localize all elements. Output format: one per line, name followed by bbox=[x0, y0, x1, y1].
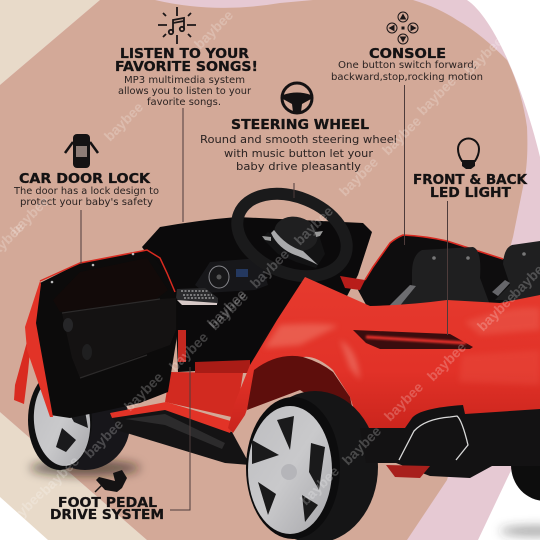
icon: console bbox=[387, 12, 418, 44]
rear bumper bbox=[360, 405, 540, 478]
watermarks: baybee bbox=[206, 288, 251, 333]
watermarks: baybee bbox=[414, 73, 459, 118]
watermarks: baybee bbox=[291, 203, 336, 248]
watermarks: baybee bbox=[204, 286, 249, 331]
heading: listen: FAVORITE SONGS! bbox=[115, 59, 258, 75]
heading: listen bbox=[115, 46, 258, 75]
text: listen: allows you to listen to your bbox=[118, 86, 252, 97]
text: steering: with music button let your bbox=[224, 147, 373, 160]
watermarks: baybee bbox=[336, 154, 381, 199]
heading: led bbox=[413, 172, 528, 201]
watermarks: baybee bbox=[7, 193, 52, 238]
heading: foot pedal: DRIVE SYSTEM bbox=[50, 507, 164, 523]
watermarks: baybee bbox=[81, 416, 126, 461]
open door bbox=[25, 250, 178, 418]
taillight bbox=[353, 330, 473, 349]
heading: console: CONSOLE bbox=[369, 46, 446, 62]
text: door lock: The door has a lock design to bbox=[13, 186, 159, 197]
watermarks: baybee bbox=[247, 246, 292, 291]
text: door lock: protect your baby's safety bbox=[20, 197, 153, 208]
watermarks: baybee bbox=[297, 463, 342, 508]
icon: steering wheel bbox=[282, 83, 312, 113]
watermarks: baybee bbox=[474, 289, 519, 334]
rear seats bbox=[387, 241, 540, 308]
watermarks: baybee bbox=[166, 329, 211, 374]
text: door lock bbox=[13, 186, 159, 208]
text: listen: favorite songs. bbox=[147, 97, 221, 108]
watermarks: baybee bbox=[461, 33, 506, 78]
watermarks: baybee bbox=[121, 369, 166, 414]
watermarks: baybee bbox=[101, 99, 146, 144]
watermarks: baybee bbox=[339, 423, 384, 468]
callout lines bbox=[81, 85, 448, 510]
text: console bbox=[331, 60, 483, 83]
watermarks: baybee bbox=[381, 379, 426, 424]
icon: door bbox=[65, 134, 98, 168]
dashboard and cabin bbox=[142, 217, 372, 372]
icon: bulb bbox=[458, 138, 479, 169]
text: console: backward,stop,rocking motion bbox=[331, 72, 483, 83]
front left wheel bbox=[28, 370, 130, 470]
sill bbox=[112, 408, 250, 465]
icon: music bbox=[158, 7, 196, 44]
watermarks: baybee bbox=[2, 486, 47, 531]
text: steering bbox=[200, 133, 397, 173]
rear cockpit rim bbox=[358, 235, 540, 312]
watermarks: baybee bbox=[379, 113, 424, 158]
heading: foot pedal: FOOT PEDAL bbox=[58, 495, 157, 511]
ground shadows bbox=[30, 460, 540, 536]
heading: steering: STEERING WHEEL bbox=[231, 117, 369, 133]
watermarks: baybee bbox=[37, 453, 82, 498]
text: console: One button switch forward, bbox=[338, 60, 477, 71]
rear wheel bbox=[246, 391, 378, 540]
icon: foot pedal bbox=[95, 470, 127, 492]
watermarks: baybee bbox=[424, 339, 469, 384]
watermarks: baybee bbox=[191, 7, 236, 52]
red rear fin bbox=[14, 320, 33, 404]
text: steering: baby drive pleasantly bbox=[236, 160, 362, 173]
floor and red interior bbox=[110, 330, 250, 433]
body highlights bbox=[247, 308, 540, 425]
text: steering: Round and smooth steering wheel bbox=[200, 133, 397, 146]
text: listen bbox=[118, 75, 252, 108]
rear right wheel bbox=[511, 429, 540, 501]
car body bbox=[228, 277, 540, 433]
heading: foot pedal bbox=[50, 495, 164, 523]
steering wheel bbox=[225, 178, 359, 292]
heading: door lock: CAR DOOR LOCK bbox=[19, 171, 151, 187]
heading: listen: LISTEN TO YOUR bbox=[120, 46, 250, 62]
car illustration bbox=[14, 178, 540, 540]
text: listen: MP3 multimedia system bbox=[124, 75, 245, 86]
instrument cluster bbox=[176, 258, 268, 305]
heading: led: LED LIGHT bbox=[430, 185, 512, 201]
heading: led: FRONT & BACK bbox=[413, 172, 528, 188]
